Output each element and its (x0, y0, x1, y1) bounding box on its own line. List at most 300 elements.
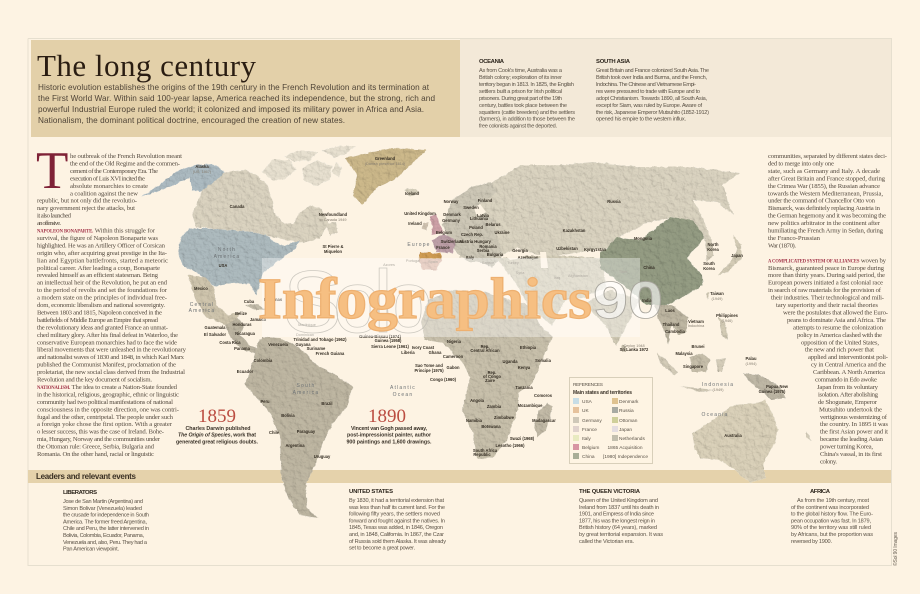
header panel: title and intro (31, 40, 460, 137)
south asia note: the risk, Japanese Emperor Mutsuhito (1852-1912) (596, 110, 709, 116)
right text column: European powers initiated a fast colonial race (768, 280, 883, 287)
oceania note (479, 59, 575, 130)
map labels: Sierra Leone (1961) (371, 344, 410, 349)
event: liberators: Pan American viewpoint. (63, 547, 119, 553)
intro text: powerful Industrial Europe ruled the world; it colonized and imposed its military power in Africa and Asia. (38, 105, 424, 114)
map labels: Costa Rica (219, 340, 241, 345)
event: united states: set to become a great power. (349, 546, 415, 552)
event: united states: 1845, Texas was added, in 1846, Oregon (349, 525, 443, 531)
left body copy: the end of the Old Regime and the commen- (70, 160, 180, 168)
event: africa: As from the 19th century, most (797, 498, 869, 504)
map labels: Norway (444, 199, 459, 204)
map labels: (US, 1867) (193, 170, 212, 174)
map labels: India (642, 298, 652, 303)
map labels: Laos (665, 308, 675, 313)
map labels: Brazil (321, 401, 333, 406)
intro text: Nationalism, the dominant political doctrine, encouraged the creation of new states. (38, 116, 345, 125)
south asia note: Great Britain and France colonized South Asia. The (596, 68, 709, 74)
map labels: Argentina (285, 443, 305, 448)
oceania note: free colonists against the deported. (479, 124, 557, 130)
right text column: peans to dominate Asia and Africa. The (787, 317, 886, 324)
map labels: South (703, 261, 715, 266)
event: queen victoria: 1901, and Empress of India since (579, 512, 654, 518)
map labels: (1994) (746, 362, 757, 366)
south asia note: res were pressured to trade with Europe and to (596, 89, 700, 95)
map labels: Martinique (298, 323, 316, 327)
left body copy: an intellectual heir of the Revolution, he put an end (37, 280, 168, 287)
intro text (38, 83, 435, 125)
right text column: Bismarck, guaranteed peace in Europe during (768, 265, 885, 272)
left body copy: absolute monarchies to create (70, 183, 148, 190)
map labels: Italy (466, 255, 475, 260)
event: liberators: America. The former freed Argentina, (63, 519, 147, 525)
left body copy: revealed himself as an efficient statesman. Being (37, 272, 159, 279)
left body copy: NAPOLEON BONAPARTE. Within this struggle for (37, 228, 156, 234)
left body copy: and nationalist waves of 1830 and 1848, in which Karl Marx (37, 354, 185, 361)
right text column: the first Asian power and it (820, 429, 888, 436)
map labels: French Guiana (316, 351, 345, 356)
right text column: new politics arbitrator in the continent after (768, 220, 881, 227)
event: queen victoria: THE QUEEN VICTORIA (579, 489, 641, 495)
left body copy: in the historical, religious, geographic, ethnic or linguistic (37, 391, 179, 398)
map labels: Papua New (766, 384, 789, 389)
land: central america (225, 318, 260, 354)
land: arctic islands (262, 146, 356, 186)
right text column: more than thirty years. During said period, the (768, 272, 885, 279)
legend: Belgium (582, 445, 599, 451)
map labels: Guinea (1975) (759, 389, 786, 394)
south asia note: adopt Christianism. Towards 1890, all South Asia, (596, 96, 707, 102)
map labels: North (708, 242, 719, 247)
left body copy: battlefields of Middle Europe an Empire that spread (37, 317, 159, 324)
map labels: Oceania (701, 412, 729, 418)
oceania note: British colony; exploration of its inner (479, 75, 562, 81)
callout: 1859: The Origin of Species, work that (178, 432, 256, 438)
legend: Denmark (619, 399, 639, 405)
map labels: Liberia (401, 350, 415, 355)
left body copy: republic, but not only did the revolutio- (37, 198, 137, 205)
oceania note: territory began in 1813. In 1825, the English (479, 82, 574, 88)
map labels: Cameroon (443, 354, 464, 359)
credit: ©Sol 90 Images (892, 532, 899, 566)
right text column: colony. (820, 458, 837, 466)
map labels: Austria Hungary (459, 239, 492, 244)
map labels: Mexico (194, 286, 208, 291)
land: india (585, 290, 640, 346)
right text column: Japan from its voluntary (817, 384, 879, 391)
map labels: Indochina (688, 324, 705, 328)
map labels: Kyrgyzstan (584, 247, 607, 252)
legend: UK (582, 408, 589, 414)
event: africa (791, 489, 873, 545)
map labels: Suriname (307, 346, 326, 351)
south asia note: SOUTH ASIA (596, 59, 631, 65)
land: middle east and iran (496, 256, 606, 326)
map labels: Dominican (296, 333, 314, 337)
left body copy: lian and Egyptian battlefronts, started a meteoric (37, 257, 168, 264)
map labels: Alaska (195, 164, 209, 169)
left body copy: survival, the figure of Napoleon Bonaparte was (37, 235, 158, 242)
land: china (600, 217, 705, 305)
event: africa: of the continent was incorporated (791, 505, 869, 511)
map labels: Afghanistan (568, 274, 588, 278)
left body copy: Romania. On the other hand, racial or linguistic (37, 451, 154, 458)
map labels: Uruguay (314, 454, 331, 459)
map labels: Rep. (488, 370, 496, 375)
map labels: Ivory Coast (412, 345, 435, 350)
map labels (189, 156, 789, 459)
map labels: Guyana (295, 342, 311, 347)
map labels: Namibia (466, 418, 483, 423)
map labels: America (189, 308, 215, 314)
left body copy: fugal and the other, centripetal. The people under such (37, 414, 174, 421)
oceania note: As from Cook's time, Australia was a (479, 68, 563, 74)
oceania note: century, battles took place between the (479, 103, 567, 109)
land: russia and central asia (460, 162, 740, 258)
map labels: Jamaica (250, 317, 267, 322)
legend: Netherlands (619, 436, 645, 442)
legend: [1980] Independence (603, 454, 648, 460)
left body copy: mia, Hungary, Norway and the communities under (37, 436, 161, 443)
map labels: Paraguay (297, 429, 316, 434)
map labels: Guinea (1958) (375, 338, 402, 343)
left body copy: consciousness in the opposite direction, one was contri- (37, 406, 179, 413)
map labels: Serbia (477, 248, 490, 253)
right text column: tary superiority and their racial theories (776, 302, 878, 309)
map labels: Taiwan (710, 291, 724, 296)
legend: REFERENCES (573, 382, 603, 388)
legend: Germany (582, 418, 602, 424)
event: liberators: Jose de San Martin (Argentina) and (63, 499, 143, 505)
land: spain north (419, 252, 442, 259)
callout: 1890 (346, 406, 432, 445)
oceania note: squatters (cattle breeders) and the settlers (479, 110, 575, 116)
land: mexico (188, 275, 240, 325)
legend: USA (582, 399, 593, 405)
map labels: Uzbekistan (556, 246, 578, 251)
map labels: Lesotho (1966) (496, 443, 525, 448)
callout: 1890: Vincent van Gogh passed away, (351, 426, 428, 432)
map labels: Iraq (554, 276, 560, 280)
south asia note (596, 59, 709, 123)
land: taiwan (706, 292, 709, 300)
callout: 1890: post-impressionist painter, author (347, 432, 431, 438)
left body copy: proletariat, the new social class derived from the Industrial (37, 369, 185, 376)
map labels: Sweden (463, 205, 479, 210)
map labels: Mozambique (518, 403, 543, 408)
map labels: El Salvador (204, 332, 227, 337)
map labels: (1946) (722, 319, 733, 323)
map labels: (1949) (713, 388, 724, 392)
map labels: Turkey (507, 261, 519, 265)
map labels: Rep. (481, 344, 489, 349)
event: united states: By 1830, it had a territorial extension that (349, 498, 444, 504)
event: united states: forward and fought against the natives. In (349, 518, 445, 524)
left body copy (37, 153, 187, 458)
land: france (432, 234, 456, 253)
event: liberators: LIBERATORS (63, 490, 97, 496)
map labels: Malaysia (675, 351, 693, 356)
event: liberators: Chile and Peru, the latter intervened in (63, 526, 149, 532)
legend: Japan (619, 427, 632, 433)
south asia note: except for Siam, was ruled by Europe. Aware of (596, 103, 702, 109)
right text column: cy in Central America and the (811, 362, 886, 369)
map labels: Ukraine (494, 230, 510, 235)
map labels: Belgium (436, 230, 452, 235)
callout: 1859: 1859 (198, 406, 236, 427)
event: africa: by Africans, but the proportion was (791, 532, 873, 538)
callout: 1859: generated great religious doubts. (176, 439, 259, 445)
intro text: Historic evolution establishes the origins of the 19th century in the French Revolution and its termination at (38, 83, 430, 92)
event: queen victoria: called the Victorian era. (579, 539, 634, 545)
map labels: Nicaragua (235, 331, 256, 336)
map labels: Newfoundland (319, 212, 348, 217)
map labels: Tanzania (515, 385, 533, 390)
map labels: Colombia (254, 358, 273, 363)
event: africa: to the global history flow. The Euro- (791, 512, 873, 518)
left body copy: it also launched (37, 213, 72, 220)
right text column: were the postulates that allowed the Euro- (783, 310, 888, 316)
legend: Russia (619, 408, 634, 414)
legend (570, 378, 652, 464)
map labels: Somalia (535, 358, 552, 363)
watermark veil (262, 258, 640, 337)
map labels: United Kingdom (404, 211, 436, 216)
event: united states: and, in 1848, California. In 1867, the Czar (349, 532, 444, 538)
map labels: Cuba (244, 299, 255, 304)
event: liberators: Bolivia, Colombia, Ecuador, Panama, (63, 533, 144, 539)
left body copy: conservative European monarchies had to face the wide (37, 339, 177, 346)
land: new guinea (743, 373, 786, 400)
legend: 1865 Acquisition (608, 445, 643, 451)
oceania note: prisoners. During great part of the 19th (479, 96, 562, 102)
land: iceland (404, 188, 420, 197)
right text column: after Great Britain and France stopped, during (768, 175, 886, 182)
right text column: the country. In 1895 it was (820, 421, 888, 428)
map labels: Syria (516, 271, 525, 275)
map labels: Congo (1960) (430, 377, 457, 382)
map labels: Botswana (481, 424, 501, 429)
map labels: Spain (428, 260, 438, 264)
land: canada (192, 170, 329, 243)
map labels: Atlantic (390, 385, 416, 391)
map labels: Japan (731, 253, 743, 258)
event: queen victoria: British history (64 years), marked (579, 525, 657, 531)
map labels: Central African (470, 348, 500, 353)
land: sri lanka (622, 345, 626, 352)
land: scandinavia and europe (442, 182, 503, 268)
map labels: to Canada 1949 (319, 218, 347, 222)
event: united states (348, 489, 446, 552)
right text column: power turning Korea, (820, 444, 873, 451)
map labels: America (214, 254, 240, 260)
header panel: regional notes (460, 39, 891, 137)
right text column: their industries. Their technological and mili- (771, 295, 884, 302)
oceania note: (farmers), in addition to those between the (479, 117, 575, 123)
south asia note: British took over India and Burma, and the French, (596, 75, 707, 81)
left body copy: NATIONALISM. The idea to create a Nation-State founded (37, 384, 178, 391)
left body copy: an offensive. (37, 220, 61, 227)
map labels: Sao Tome and (415, 363, 443, 368)
oceania note: OCEANIA (479, 59, 505, 65)
right text column: Mutsuhito undertook the (819, 406, 882, 413)
legend: France (582, 427, 597, 433)
right text column: policy in America clashed with the (797, 332, 882, 339)
map labels: Greece (482, 261, 494, 265)
map labels: Azerbaijan (518, 255, 539, 260)
right text column: Caribbean. A North America (813, 369, 885, 376)
map labels: Central (190, 302, 214, 308)
event: africa: AFRICA (810, 489, 831, 495)
left body copy: a foreign yoke chose the first option. With a greater (37, 421, 173, 428)
title: The long century (37, 48, 256, 83)
right text column: towards the Western Mediterranean, Prussia, (768, 190, 883, 197)
band: leaders and relevant events: Leaders and relevant events (36, 472, 137, 481)
map labels: Thailand (663, 322, 680, 327)
right text column: humiliating the French Army in Sedan, during (768, 228, 884, 234)
left body copy: he outbreak of the French Revolution meant (70, 153, 182, 160)
map labels: Germany (442, 218, 461, 223)
south asia note: opened his empire to the western influx. (596, 117, 686, 123)
event: liberators: the crusade for independence in South (63, 513, 149, 519)
land: newfoundland (327, 222, 338, 236)
map labels: Philippines (716, 313, 739, 318)
map labels: Panama (234, 346, 251, 351)
right text column: state, such as Germany and Italy. A decade (768, 168, 880, 175)
watermark: outlined number: 90 (593, 272, 663, 330)
legend: Italy (582, 436, 591, 442)
map labels: Venezuela (268, 342, 289, 347)
right text column: opposition of the United States, (801, 339, 879, 346)
map labels: Miquelon (324, 249, 342, 254)
map labels: China (643, 265, 655, 270)
left body copy: highlighted. He was an Artillery Officer of Corsican (37, 242, 166, 249)
land: philippines (718, 316, 728, 340)
map labels: Canada (230, 204, 245, 209)
event: africa: reversed by 1900. (791, 539, 832, 545)
left body copy: community had two political manifestations of national (37, 399, 173, 406)
land: greenland (345, 148, 427, 205)
right text column: Bismarck, was definitely replacing Austria in (768, 205, 881, 212)
map labels: Czech Rep. (461, 232, 483, 237)
map labels: Indonesia (702, 382, 734, 388)
left body copy: published the Communist Manifest, proclamation of the (37, 362, 176, 369)
map labels: Guinea-Bissau (1974) (359, 334, 401, 339)
map labels: Ethiopia (520, 345, 537, 350)
map labels: Vietnam (688, 319, 704, 324)
map labels: Ghana (429, 350, 442, 355)
watermark: orange word: Infographics (258, 266, 592, 331)
right text column: War (1870). (768, 242, 796, 249)
map labels: Georgia (512, 248, 528, 253)
left body copy: political career. After leading a coup, Bonaparte (37, 265, 160, 272)
right text column: under the command of Chancellor Otto von (768, 198, 876, 205)
land: japan (718, 235, 742, 275)
south asia note: Indochina. The Chinese and Vietnamese Empi- (596, 82, 696, 88)
map labels: Brunei (692, 344, 704, 349)
event: queen victoria: Queen of the United Kingdom and (579, 498, 658, 504)
map labels: Honduras (232, 322, 252, 327)
left body copy: the revolutionary ideas and granted France an unmat- (37, 324, 168, 331)
map labels: South (296, 383, 316, 389)
map labels: Angola (470, 398, 485, 403)
map labels: Lithuania (470, 216, 489, 221)
left body copy: execution of Luis XVI incited the (70, 175, 145, 182)
event: united states: of Russia sold them Alaska. It was already (349, 539, 446, 545)
map labels: Azores (383, 263, 395, 267)
map labels: Tibet (619, 270, 628, 274)
land: borneo (690, 353, 710, 372)
land: spain south (419, 259, 442, 270)
map labels: Ceylon 1948 (623, 344, 645, 348)
map labels: Ireland (408, 221, 422, 226)
map labels: Kazakhstan (563, 228, 586, 233)
right text column: China's vassal, in its first (820, 451, 882, 458)
map labels: Kenya (518, 365, 531, 370)
map labels: Bulgaria (487, 252, 504, 257)
left body copy: o lesser success, this was the case of Ireland. Bohe- (37, 429, 164, 436)
land: caribbean (245, 304, 266, 310)
land: java (680, 386, 714, 392)
map labels: Cambodia (665, 329, 686, 334)
right text column: the German hegemony and it was becoming the (768, 213, 886, 220)
map labels: South Africa (473, 448, 498, 453)
map labels: (Danish presence 1814) (365, 162, 406, 166)
left body copy: ched military glory. After his final defeat in Waterloo, the (37, 332, 178, 339)
land: alaska (141, 164, 225, 197)
map labels: Guatemala (205, 325, 226, 330)
right text column: ded to merge into only one (768, 160, 834, 168)
left body copy: a coalition against the new (70, 190, 138, 197)
left body copy: to the period of revolts and set the foundations for (37, 287, 168, 294)
map labels: St Pierre & (323, 244, 344, 249)
event: queen victoria: 1877, his was the longest reign in (579, 518, 655, 524)
left body copy: Between 1803 and 1815, Napoleon conceived in the (37, 310, 162, 316)
event: liberators (63, 490, 149, 553)
map labels: Iceland (405, 191, 420, 196)
land: australia (693, 400, 778, 483)
right text column: the Crimea War (1855), the Russian advance (768, 183, 880, 190)
map labels: Uganda (502, 359, 518, 364)
callout: 1890: 900 paintings and 1,600 drawings. (346, 439, 432, 445)
map labels: Zimbabwe (494, 415, 515, 420)
land: korea (705, 240, 714, 262)
left body copy: liberal movements that were unleashed in the revolutionary (37, 347, 187, 354)
right text column: applied and interventionist poli- (808, 354, 888, 361)
land: usa (178, 228, 300, 296)
world map (141, 146, 812, 518)
map labels: Denmark (443, 212, 461, 217)
left body copy: cement of the Contemporary Era. The (70, 168, 158, 175)
map labels: Republic (473, 452, 491, 457)
legend: Main states and territories (573, 390, 632, 396)
land: africa (421, 290, 553, 459)
left text column (36, 142, 187, 458)
right text column: attempts to resume the colonization (793, 324, 884, 331)
event: africa: pean occupation was fast. In 1879, (791, 518, 871, 524)
left body copy: nary government reject the attacks, but (37, 205, 135, 212)
map labels: Belize (235, 311, 248, 316)
event: united states: UNITED STATES (349, 489, 393, 495)
map labels: Latvia (477, 213, 490, 218)
land: sulawesi (716, 358, 726, 372)
legend: China (582, 454, 595, 460)
right text column: A COMPLICATED SYSTEM OF ALLIANCES woven by (768, 257, 887, 264)
map labels: Gabon (447, 365, 460, 370)
map labels: Ecuador (237, 369, 254, 374)
band: leaders and relevant events (28, 470, 891, 483)
map labels: Belarus (485, 222, 501, 227)
